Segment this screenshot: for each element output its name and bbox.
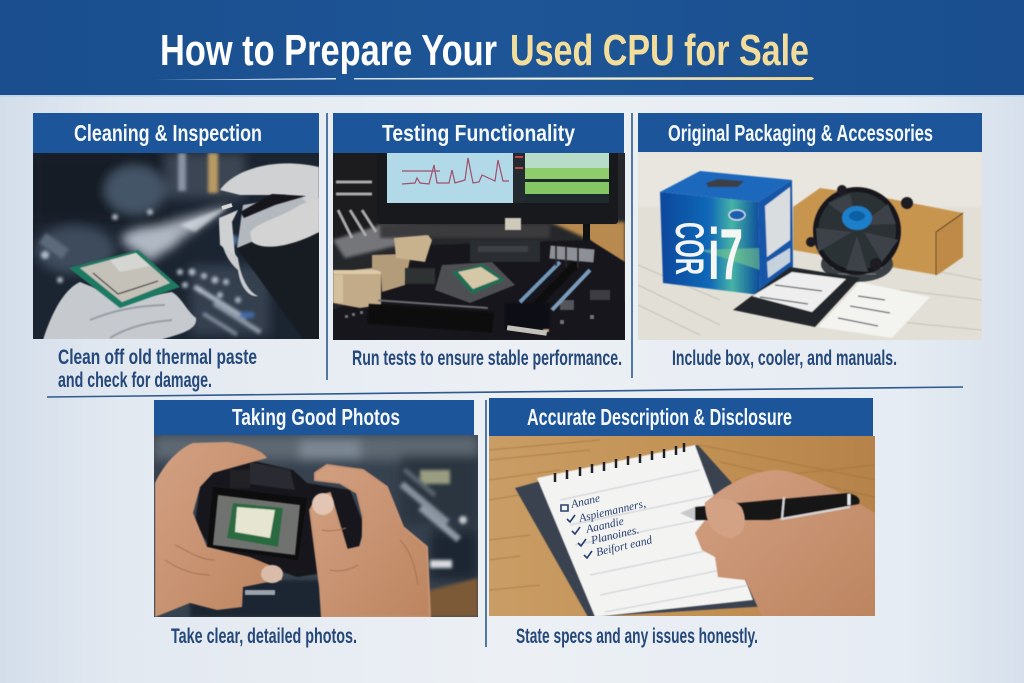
caption: Clean off old thermal paste — [58, 346, 257, 369]
caption: Include box, cooler, and manuals. — [672, 347, 897, 370]
photo: retail box, cooler, manual — [638, 152, 982, 340]
title: How to Prepare Your — [160, 26, 497, 75]
CPU in socket — [435, 262, 515, 303]
caption: and check for damage. — [58, 369, 212, 392]
thumb — [705, 498, 745, 538]
CPU box — [660, 171, 793, 295]
CPU — [69, 250, 180, 308]
spiral binding — [555, 443, 684, 482]
caption: State specs and any issues honestly. — [516, 625, 758, 648]
box logo — [676, 223, 742, 280]
panel: accurate description and disclosure — [489, 398, 875, 648]
heading: cleaning and inspection: Cleaning & Inspection — [74, 120, 262, 146]
box logo: i7 — [708, 215, 743, 295]
box logo: COR — [667, 222, 711, 275]
motherboard — [333, 240, 625, 340]
heading: accurate description — [489, 398, 873, 436]
heading: taking good photos: Taking Good Photos — [232, 404, 400, 430]
manual booklet — [733, 267, 930, 338]
handwritten checklist: Anane — [569, 493, 601, 511]
monitor — [377, 150, 618, 224]
RAM slots — [505, 246, 594, 329]
panel: testing functionality — [333, 113, 625, 370]
handwritten checklist: Aaandie — [584, 516, 625, 536]
heading: accurate description: Accurate Description & Disclosure — [527, 404, 792, 430]
right hand — [310, 465, 430, 617]
cooler — [806, 185, 913, 282]
title: Used CPU for Sale — [510, 26, 809, 75]
caption: Take clear, detailed photos. — [171, 625, 357, 648]
left hand — [155, 442, 283, 617]
panel: original packaging and accessories — [638, 113, 982, 370]
camera — [195, 460, 363, 577]
heading: testing functionality — [333, 113, 624, 153]
aerosol can — [237, 222, 319, 339]
photo: hands holding camera — [154, 435, 478, 617]
caption — [58, 346, 257, 392]
lower glove — [43, 282, 196, 340]
heading: taking good photos — [154, 400, 474, 435]
heading: original packaging — [638, 113, 982, 152]
monitor screen charts — [387, 153, 609, 203]
heading: testing functionality: Testing Functionality — [382, 120, 575, 146]
handwritten checklist: Planoines. — [589, 524, 640, 547]
photo: notepad and pen — [489, 436, 875, 617]
front fingers — [250, 198, 319, 247]
pen — [680, 493, 860, 520]
photo: spraying a CPU — [33, 153, 319, 340]
board details — [345, 240, 610, 332]
hand — [695, 470, 875, 616]
handwritten checklist: Beifort eand — [595, 534, 654, 559]
handwritten checklist: Aspiemanners, — [577, 498, 647, 525]
upper glove back — [220, 163, 319, 215]
title — [160, 26, 809, 75]
kraft box — [793, 188, 963, 275]
caption: Run tests to ensure stable performance. — [352, 347, 622, 370]
handwritten checklist — [561, 493, 654, 559]
spray mist — [120, 204, 232, 262]
packaging cubes — [333, 235, 432, 308]
notepad page — [537, 445, 753, 617]
notepad backing — [515, 445, 770, 617]
header banner — [0, 0, 1024, 97]
panel: cleaning and inspection — [33, 113, 319, 392]
camera screen — [213, 495, 300, 555]
photo: motherboard under test — [333, 150, 625, 340]
heading: cleaning and inspection — [33, 113, 319, 153]
panel: taking good photos — [154, 400, 478, 648]
